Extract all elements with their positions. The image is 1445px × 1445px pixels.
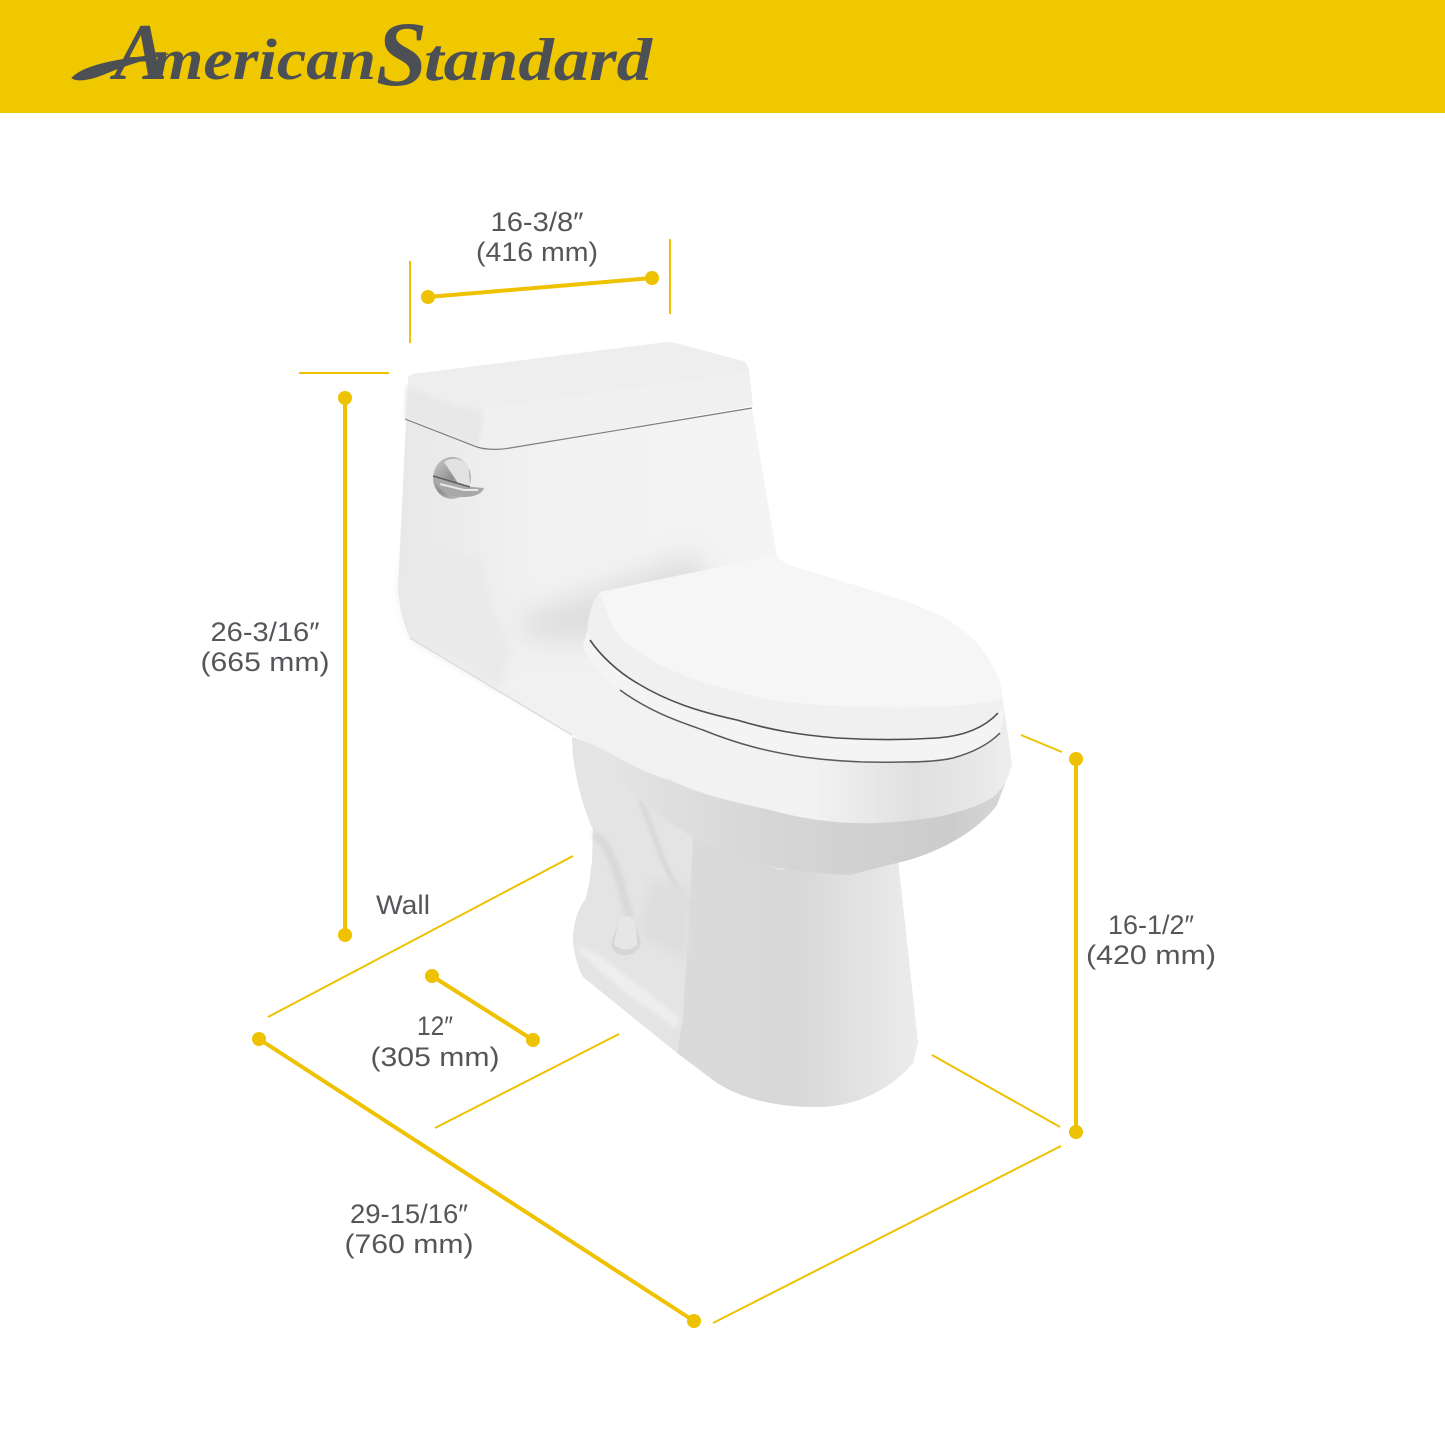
logo: American Standard: tandard — [424, 27, 653, 93]
dimension: overall depth 29-15/16: (760 mm) — [344, 1229, 474, 1259]
dimension: rough-in 12 — [370, 969, 619, 1128]
toilet: flush handle — [433, 457, 484, 499]
toilet: tank body and deck — [398, 409, 785, 741]
toilet: pedestal and foot — [572, 737, 918, 1107]
toilet: tank lid — [405, 342, 753, 449]
dimension: rim height 16-1/2: 16-1/2″ — [1108, 910, 1194, 940]
logo: American Standard: S — [376, 3, 427, 105]
toilet illustration — [398, 342, 1012, 1107]
dimension: rim height 16-1/2 — [713, 735, 1216, 1323]
dimension: overall height 26-3/16: (665 mm) — [200, 647, 330, 677]
toilet: bolt cap — [611, 916, 641, 955]
logo: American Standard: merican — [152, 27, 376, 92]
toilet: seat ring — [583, 620, 1004, 762]
wall label and line: Wall — [376, 890, 430, 920]
logo: American Standard — [72, 3, 653, 105]
header band — [0, 0, 1445, 113]
dimension: rough-in 12: 12″ — [417, 1011, 453, 1041]
toilet: seat lid — [588, 555, 1002, 740]
dimension: top width 16-3/8 — [410, 207, 670, 343]
wall label and line — [268, 856, 573, 1017]
dimension: overall depth 29-15/16 — [252, 1032, 701, 1328]
toilet: bowl underside — [610, 753, 1012, 875]
dimension: top width 16-3/8: (416 mm) — [476, 237, 598, 267]
toilet: rim — [572, 670, 1012, 823]
dimension: rough-in 12: (305 mm) — [370, 1042, 500, 1072]
dimension: overall depth 29-15/16: 29-15/16″ — [350, 1199, 468, 1229]
logo: American Standard: A — [114, 9, 167, 97]
dimension: top width 16-3/8: 16-3/8″ — [490, 207, 584, 237]
dimension: overall height 26-3/16 — [200, 373, 389, 942]
dimension: overall height 26-3/16: 26-3/16″ — [210, 617, 320, 647]
dimension: rim height 16-1/2: (420 mm) — [1086, 940, 1216, 970]
